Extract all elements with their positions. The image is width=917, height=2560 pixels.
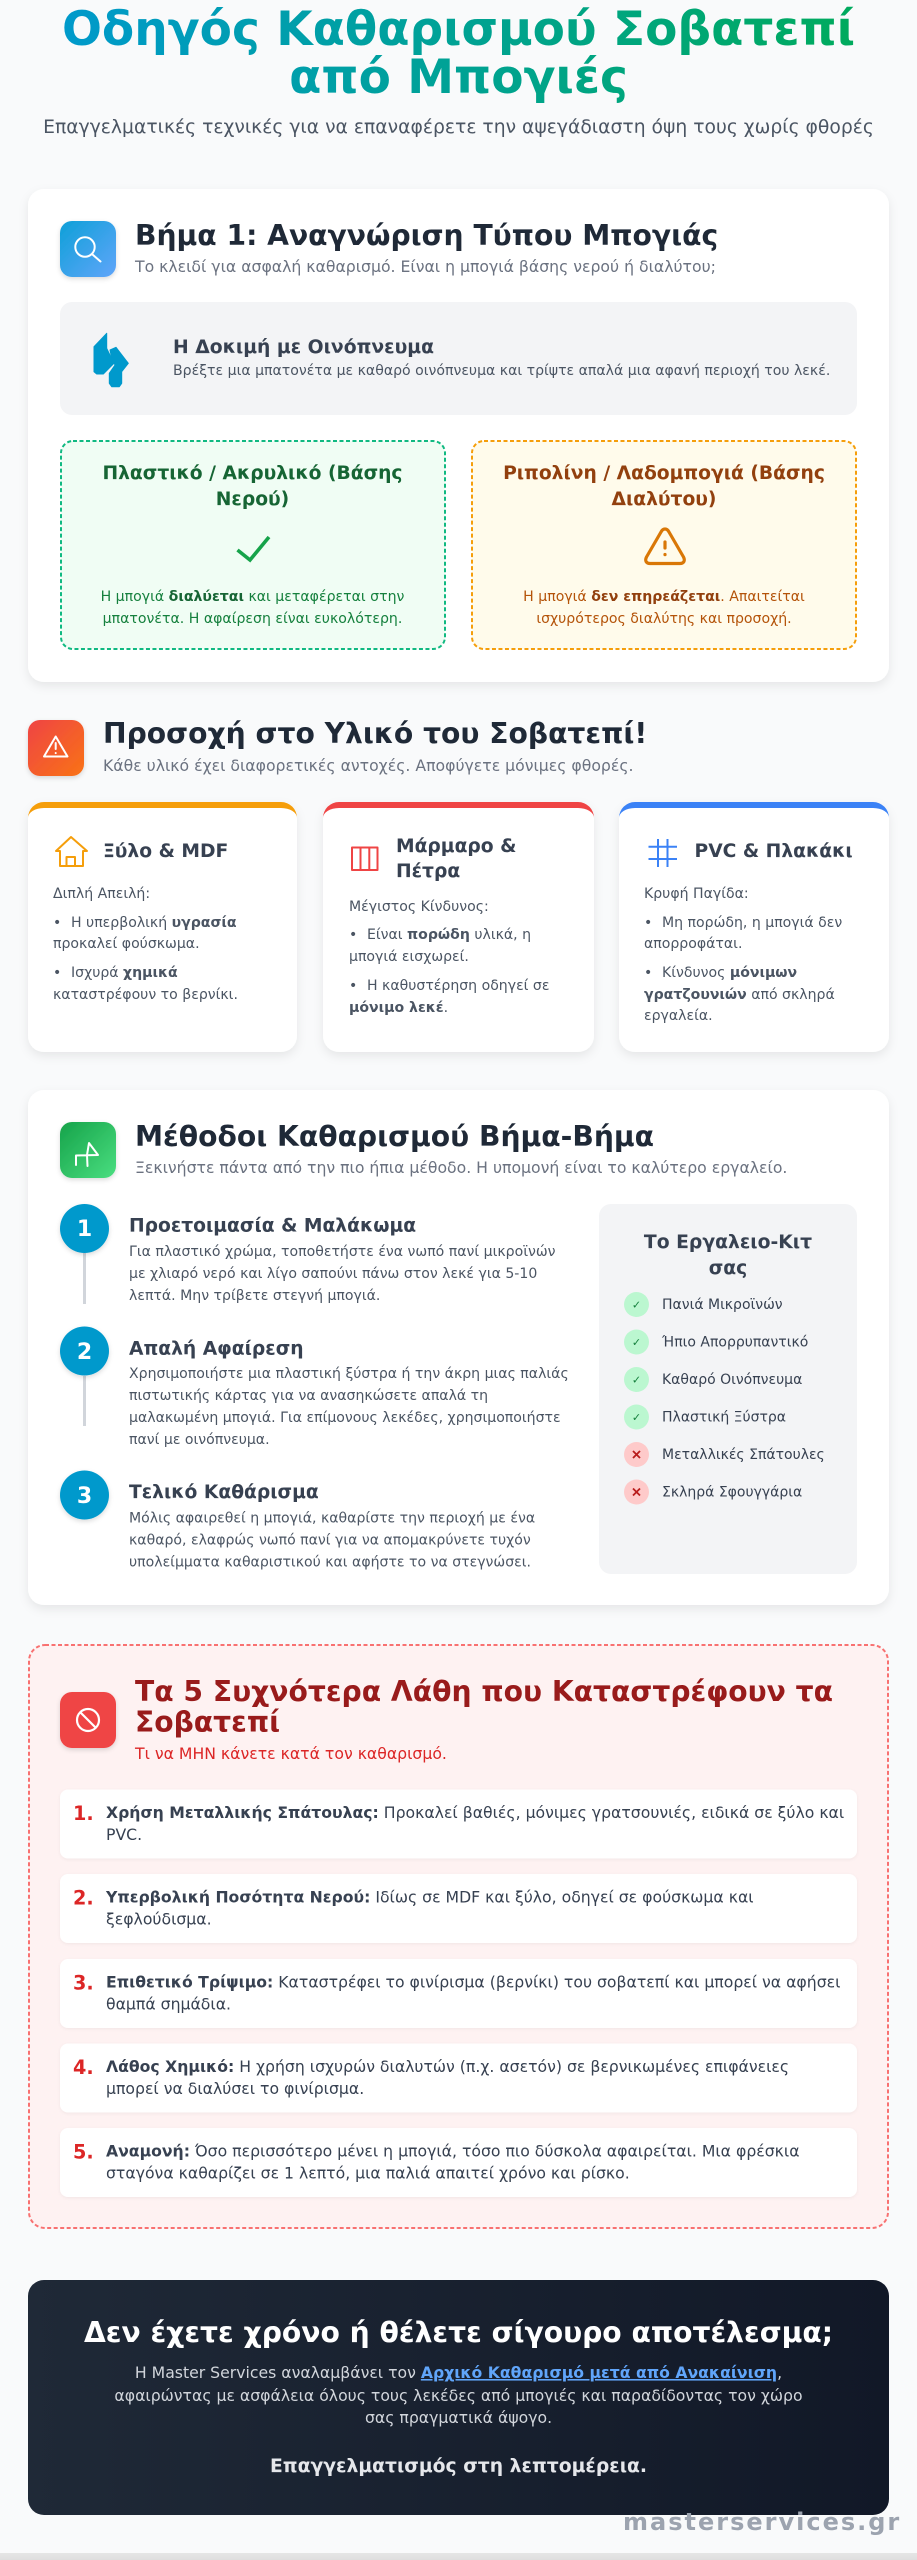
- material text: marble: Είναι: [367, 927, 407, 943]
- mistake 4: [60, 2044, 857, 2112]
- water based title: [102, 463, 403, 510]
- mistake 1: PVC.: [106, 1825, 142, 1844]
- material text: wood: καταστρέφουν το βερνίκι.: [53, 987, 238, 1003]
- watermark: masterservices.gr: [623, 2508, 901, 2536]
- subheading: step 1: Το κλειδί για ασφαλή καθαρισμό. Είναι η μπογιά βάσης νερού ή διαλύτου;: [134, 257, 716, 276]
- material text: wood: Ισχυρά: [71, 965, 123, 981]
- step 1: Για πλαστικό χρώμα, τοποθετήστε ένα νωπό πανί μικροϊνών: [129, 1244, 556, 1260]
- title: Οδηγός Καθαρισμού Σοβατεπί: [62, 2, 855, 57]
- step 3: υπολείμματα καθαριστικού και αφήστε το να στεγνώσει.: [129, 1554, 531, 1570]
- material text: marble: μόνιμο λεκέ.: [349, 1000, 448, 1016]
- material text: wood: προκαλεί φούσκωμα.: [53, 936, 200, 952]
- mistake 5: Αναμονή: Όσο περισσότερο μένει η μπογιά, τόσο πιο δύσκολα αφαιρείται. Μια φρέσκια: [106, 2142, 800, 2160]
- material text: PVC: Κρυφή Παγίδα:: [644, 886, 749, 902]
- heading: mistakes: Σοβατεπί: [135, 1706, 280, 1738]
- mistake 5: [60, 2128, 857, 2197]
- material text: PVC: Μη πορώδη, η μπογιά δεν: [662, 915, 842, 931]
- icon: ban: [60, 1692, 116, 1748]
- icon: tools: [60, 1122, 116, 1178]
- panel: solvent based: [472, 441, 856, 649]
- step 3: 3: [77, 1484, 92, 1509]
- section: material warning header: [28, 717, 647, 776]
- material text: wood: •: [53, 965, 61, 981]
- toolkit title: [644, 1232, 812, 1279]
- toolkit item: alcohol: [624, 1367, 802, 1392]
- alcohol test title: Η Δοκιμή με Οινόπνευμα: [173, 337, 434, 358]
- panel: wood and MDF: [28, 802, 297, 1052]
- step 3: Μόλις αφαιρεθεί η μπογιά, καθαρίστε την περιοχή με ένα: [129, 1510, 535, 1526]
- mistake 1: Χρήση Μεταλλικής Σπάτουλας: Προκαλεί βαθιές, μόνιμες γρατσουνιές, ειδικά σε ξύλο και: [106, 1803, 844, 1822]
- mistake 4: 4.: [73, 2056, 94, 2079]
- water based text: μπατονέτα. Η αφαίρεση είναι ευκολότερη.: [103, 611, 402, 627]
- mistake 2: ξεφλούδισμα.: [106, 1910, 212, 1928]
- toolkit item: microfiber: [624, 1292, 783, 1317]
- solvent based text: Η μπογιά δεν επηρεάζεται. Απαιτείται: [523, 589, 805, 605]
- step 3: [60, 1470, 535, 1570]
- material title: marble: Πέτρα: [396, 861, 460, 882]
- bottom band: [0, 2553, 917, 2560]
- panel: step 1 paint identification: [28, 189, 889, 682]
- heading: mistakes: [135, 1675, 833, 1738]
- material text: marble: •: [349, 927, 357, 943]
- subheading: material warning: Κάθε υλικό έχει διαφορετικές αντοχές. Αποφύγετε μόνιμες φθορές.: [103, 756, 634, 775]
- panel: call to action: [28, 2280, 889, 2515]
- material text: PVC: [644, 886, 842, 1024]
- title: από Μπογιές: [289, 50, 628, 105]
- step 2: Απαλή Αφαίρεση: [129, 1338, 304, 1360]
- material text: marble: Μέγιστος Κίνδυνος:: [349, 899, 489, 915]
- alcohol test text: Βρέξτε μια μπατονέτα με καθαρό οινόπνευμα και τρίψτε απαλά μια αφανή περιοχή του λεκέ.: [173, 363, 830, 379]
- mistake 3: 3.: [73, 1972, 94, 1994]
- heading: methods: Μέθοδοι Καθαρισμού Βήμα-Βήμα: [135, 1120, 654, 1153]
- material text: wood: υγρασία: [172, 915, 237, 931]
- toolkit item: plastic scraper: Πλαστική Ξύστρα: [662, 1410, 786, 1426]
- panel: marble and stone: [323, 802, 594, 1052]
- subheading: methods: Ξεκινήστε πάντα από την πιο ήπια μέθοδο. Η υπομονή είναι το καλύτερο εργαλείο.: [135, 1158, 787, 1177]
- icon: marble: [352, 848, 378, 870]
- subtitle: Επαγγελματικές τεχνικές για να επαναφέρετε την αψεγάδιαστη όψη τους χωρίς φθορές: [43, 117, 874, 138]
- toolkit item: hard sponges: [624, 1480, 802, 1504]
- mistake 3: Επιθετικό Τρίψιμο: Καταστρέφει το φινίρισμα (βερνίκι) του σοβατεπί και μπορεί να αφήσει: [106, 1972, 840, 1992]
- material text: PVC: απορροφάται.: [644, 936, 742, 952]
- step 3: καθαρό, ελαφρώς νωπό πανί για να απομακρύνετε τυχόν: [129, 1532, 531, 1548]
- panel: PVC and tile: [619, 802, 889, 1052]
- toolkit item: alcohol: Καθαρό Οινόπνευμα: [662, 1372, 802, 1388]
- toolkit item: detergent: ✓: [632, 1336, 641, 1349]
- toolkit item: detergent: Ήπιο Απορρυπαντικό: [661, 1334, 808, 1350]
- CTA heading: Δεν έχετε χρόνο ή θέλετε σίγουρο αποτέλεσμα;: [84, 2316, 833, 2349]
- panel: toolkit: [599, 1204, 857, 1574]
- heading: mistakes: Τα 5 Συχνότερα Λάθη που Καταστρέφουν τα: [135, 1675, 833, 1708]
- icon: grid: [648, 839, 677, 867]
- CTA tagline: Επαγγελματισμός στη λεπτομέρεια.: [270, 2456, 647, 2477]
- material text: marble: •: [349, 978, 357, 994]
- toolkit title: σας: [709, 1258, 747, 1279]
- solvent based text: ισχυρότερος διαλύτης και προσοχή.: [536, 611, 792, 627]
- material text: PVC: •: [644, 915, 652, 931]
- material text: PVC: εργαλεία.: [644, 1008, 713, 1024]
- icon: house: [56, 837, 87, 866]
- step 1: 1: [77, 1217, 92, 1242]
- material text: marble: [349, 899, 549, 1016]
- mistake 3: θαμπά σημάδια.: [106, 1994, 231, 2014]
- mistake 2: [60, 1874, 857, 1943]
- panel: alcohol test: [60, 302, 857, 415]
- step 2: πιστωτικής κάρτας για να ανασηκώσετε απαλά τη: [129, 1388, 488, 1404]
- panel: cleaning methods: [28, 1090, 889, 1605]
- toolkit item: microfiber: Πανιά Μικροϊνών: [662, 1297, 783, 1313]
- solvent based text: [523, 589, 805, 627]
- material text: PVC: μόνιμων: [730, 965, 797, 981]
- solvent based title: Διαλύτου): [612, 489, 716, 510]
- solvent based title: [503, 463, 825, 510]
- water based text: [101, 589, 405, 627]
- material text: PVC: •: [644, 965, 652, 981]
- toolkit item: microfiber: ✓: [632, 1298, 641, 1312]
- mistake 2: Υπερβολική Ποσότητα Νερού: Ιδίως σε MDF και ξύλο, οδηγεί σε φούσκωμα και: [105, 1888, 754, 1906]
- material title: marble: Μάρμαρο &: [396, 836, 516, 857]
- mistake 5: 5.: [73, 2140, 94, 2164]
- step 2: 2: [77, 1340, 92, 1365]
- water based title: Νερού): [216, 489, 289, 510]
- toolkit item: plastic scraper: ✓: [632, 1411, 641, 1424]
- material title: marble: [396, 836, 516, 882]
- toolkit item: plastic scraper: [624, 1404, 786, 1430]
- mistake 5: σταγόνα καθαρίζει σε 1 λεπτό, μια παλιά απαιτεί χρόνο και ρίσκο.: [106, 2164, 630, 2182]
- material text: wood: Η υπερβολική: [71, 915, 172, 931]
- panel: water based: [61, 441, 445, 649]
- material text: marble: πορώδη υλικά, η: [407, 927, 531, 943]
- panel: common mistakes: [29, 1645, 888, 2228]
- mistake 4: μπορεί να διαλύσει το φινίρισμα.: [106, 2079, 364, 2098]
- material text: wood: [53, 886, 238, 1003]
- toolkit item: alcohol: ✓: [632, 1374, 641, 1386]
- step 1: λεπτά. Μην τρίβετε στεγνή μπογιά.: [129, 1288, 380, 1304]
- step 1: Προετοιμασία & Μαλάκωμα: [129, 1216, 416, 1236]
- icon: warning triangle: [646, 529, 684, 564]
- toolkit title: Το Εργαλειο-Κιτ: [644, 1232, 812, 1253]
- material text: marble: Η καθυστέρηση οδηγεί σε: [367, 978, 549, 994]
- mistake 1: [60, 1790, 857, 1858]
- CTA text: [114, 2363, 803, 2427]
- subheading: mistakes: Τι να ΜΗΝ κάνετε κατά τον καθαρισμό.: [134, 1744, 447, 1763]
- icon: test hand: [94, 333, 128, 387]
- material title: wood: Ξύλο & MDF: [103, 841, 228, 862]
- icon: warning: [28, 720, 84, 776]
- material text: wood: •: [53, 915, 61, 931]
- heading: material warning: Προσοχή στο Υλικό του Σοβατεπί!: [103, 717, 647, 750]
- material text: wood: χημικά: [123, 965, 178, 981]
- step 3: Τελικό Καθάρισμα: [129, 1482, 319, 1503]
- material text: PVC: γρατζουνιών από σκληρά: [644, 987, 835, 1003]
- title: [62, 2, 855, 105]
- material text: marble: μπογιά εισχωρεί.: [349, 949, 469, 965]
- CTA text: αφαιρώντας με ασφάλεια όλους τους λεκέδες από μπογιές και παραδίδοντας τον χώρο: [114, 2386, 803, 2405]
- mistake 1: 1.: [73, 1802, 94, 1825]
- step 2: μαλακωμένη μπογιά. Για επίμονους λεκέδες, χρησιμοποιήστε: [129, 1410, 561, 1426]
- mistake 4: Λάθος Χημικό: Η χρήση ισχυρών διαλυτών (π.χ. ασετόν) σε βερνικωμένες επιφάνειες: [106, 2057, 789, 2076]
- toolkit item: hard sponges: Σκληρά Σφουγγάρια: [662, 1484, 802, 1500]
- step 2: Χρησιμοποιήστε μια πλαστική ξύστρα ή την άκρη μιας παλιάς: [129, 1366, 569, 1382]
- icon: magnifier: [60, 221, 116, 277]
- material text: wood: Διπλή Απειλή:: [53, 886, 150, 902]
- heading: step 1: Βήμα 1: Αναγνώριση Τύπου Μπογιάς: [135, 219, 718, 252]
- icon: check: [238, 537, 269, 560]
- step 1: [60, 1204, 556, 1304]
- solvent based title: Ριπολίνη / Λαδομπογιά (Βάσης: [503, 463, 825, 484]
- CTA text: Η Master Services αναλαμβάνει τον Αρχικό Καθαρισμό μετά από Ανακαίνιση,: [135, 2363, 782, 2382]
- mistake 3: [60, 1959, 857, 2028]
- water based title: Πλαστικό / Ακρυλικό (Βάσης: [102, 463, 403, 484]
- CTA text: σας πραγματικά άψογο.: [365, 2408, 552, 2427]
- toolkit item: metal spatulas: Μεταλλικές Σπάτουλες: [662, 1447, 825, 1463]
- step 1: με χλιαρό νερό και λίγο σαπούνι πάνω στον λεκέ για 5-10: [129, 1266, 537, 1282]
- toolkit item: detergent: [624, 1330, 808, 1354]
- mistake 2: 2.: [73, 1886, 94, 1910]
- toolkit item: metal spatulas: [624, 1442, 825, 1467]
- material text: PVC: Κίνδυνος: [662, 965, 730, 981]
- step 2: πανί με οινόπνευμα.: [129, 1432, 270, 1448]
- step 2: [60, 1326, 569, 1448]
- material title: PVC: PVC & Πλακάκι: [694, 841, 853, 862]
- water based text: Η μπογιά διαλύεται και μεταφέρεται στην: [101, 589, 405, 605]
